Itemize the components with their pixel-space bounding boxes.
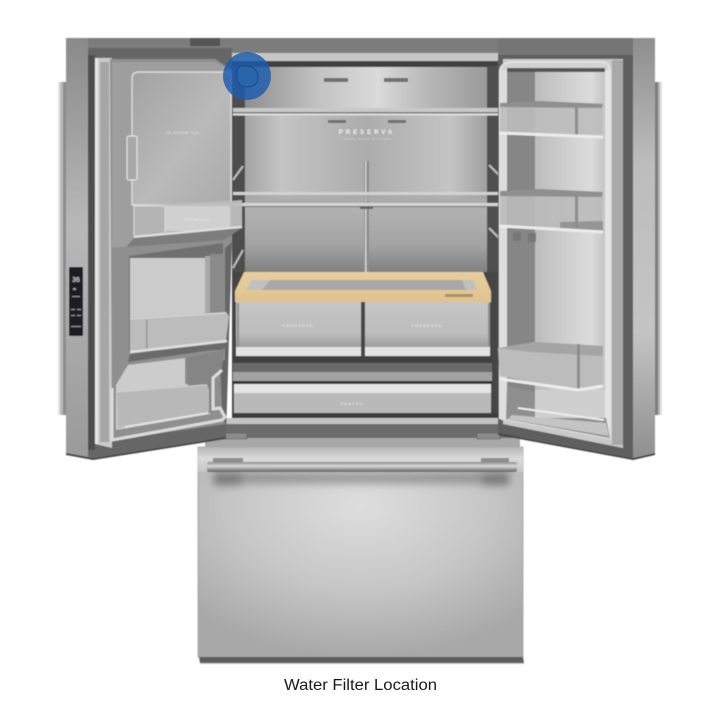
- lower door recess: [129, 243, 224, 352]
- ice bin latch: [127, 136, 137, 180]
- middle right door bin: [499, 189, 603, 242]
- center rail: [360, 161, 373, 273]
- control panel: 36: [72, 277, 80, 284]
- right door handle: [655, 82, 662, 415]
- drawer base: [199, 657, 524, 663]
- brand lettering: [339, 130, 395, 141]
- right crisper bin: [365, 302, 490, 356]
- filter cap: [237, 66, 258, 87]
- middle door bin: [128, 312, 229, 362]
- wood tray: [235, 272, 491, 302]
- ceiling light slots: [324, 78, 408, 123]
- handle mounts: [213, 458, 509, 463]
- bottom door bin: [117, 384, 209, 428]
- water filter highlight: [223, 52, 271, 100]
- pantry drawer: [234, 384, 491, 413]
- pantry rail: [233, 356, 492, 384]
- right door: [498, 38, 655, 460]
- control panel: [69, 267, 83, 336]
- door liner: [500, 62, 611, 438]
- lower door opening: [112, 350, 225, 440]
- left crisper bin: PRESERVA: [282, 323, 314, 328]
- crisper drawers section: [205, 272, 520, 447]
- pantry drawer: PANTRY: [340, 401, 364, 406]
- lower right door bin: [498, 342, 603, 391]
- left door: [66, 38, 242, 460]
- handle shadow: [213, 472, 510, 486]
- door gasket: [503, 59, 623, 448]
- hinge plates: [224, 433, 500, 439]
- left door handle: [58, 82, 66, 415]
- door bottom lip: [506, 386, 610, 438]
- ice compartment: [112, 62, 232, 248]
- back wall: [245, 67, 487, 275]
- side shelf supports: [233, 165, 499, 268]
- middle shelf: [233, 192, 498, 207]
- left crisper bin: [236, 302, 361, 356]
- top left door bin: PRESERVA: [184, 218, 210, 222]
- freezer drawer: [198, 447, 524, 664]
- door edge panel: [66, 38, 88, 458]
- upper shelf: [233, 108, 498, 116]
- gasket strip: [95, 58, 112, 448]
- top left door bin: [126, 200, 242, 247]
- caption: Water Filter Location: [284, 677, 437, 694]
- right crisper bin: PRESERVA: [411, 323, 443, 328]
- handle bar: [207, 462, 517, 472]
- refrigerator: [58, 38, 662, 664]
- upper right door bin: [499, 101, 603, 137]
- brand lettering: FOOD CARE SYSTEM: [343, 137, 391, 141]
- brand lettering: PRESERVA: [339, 130, 395, 136]
- cabinet interior: [88, 38, 633, 276]
- ice compartment: IN DOOR ICE: [166, 131, 200, 135]
